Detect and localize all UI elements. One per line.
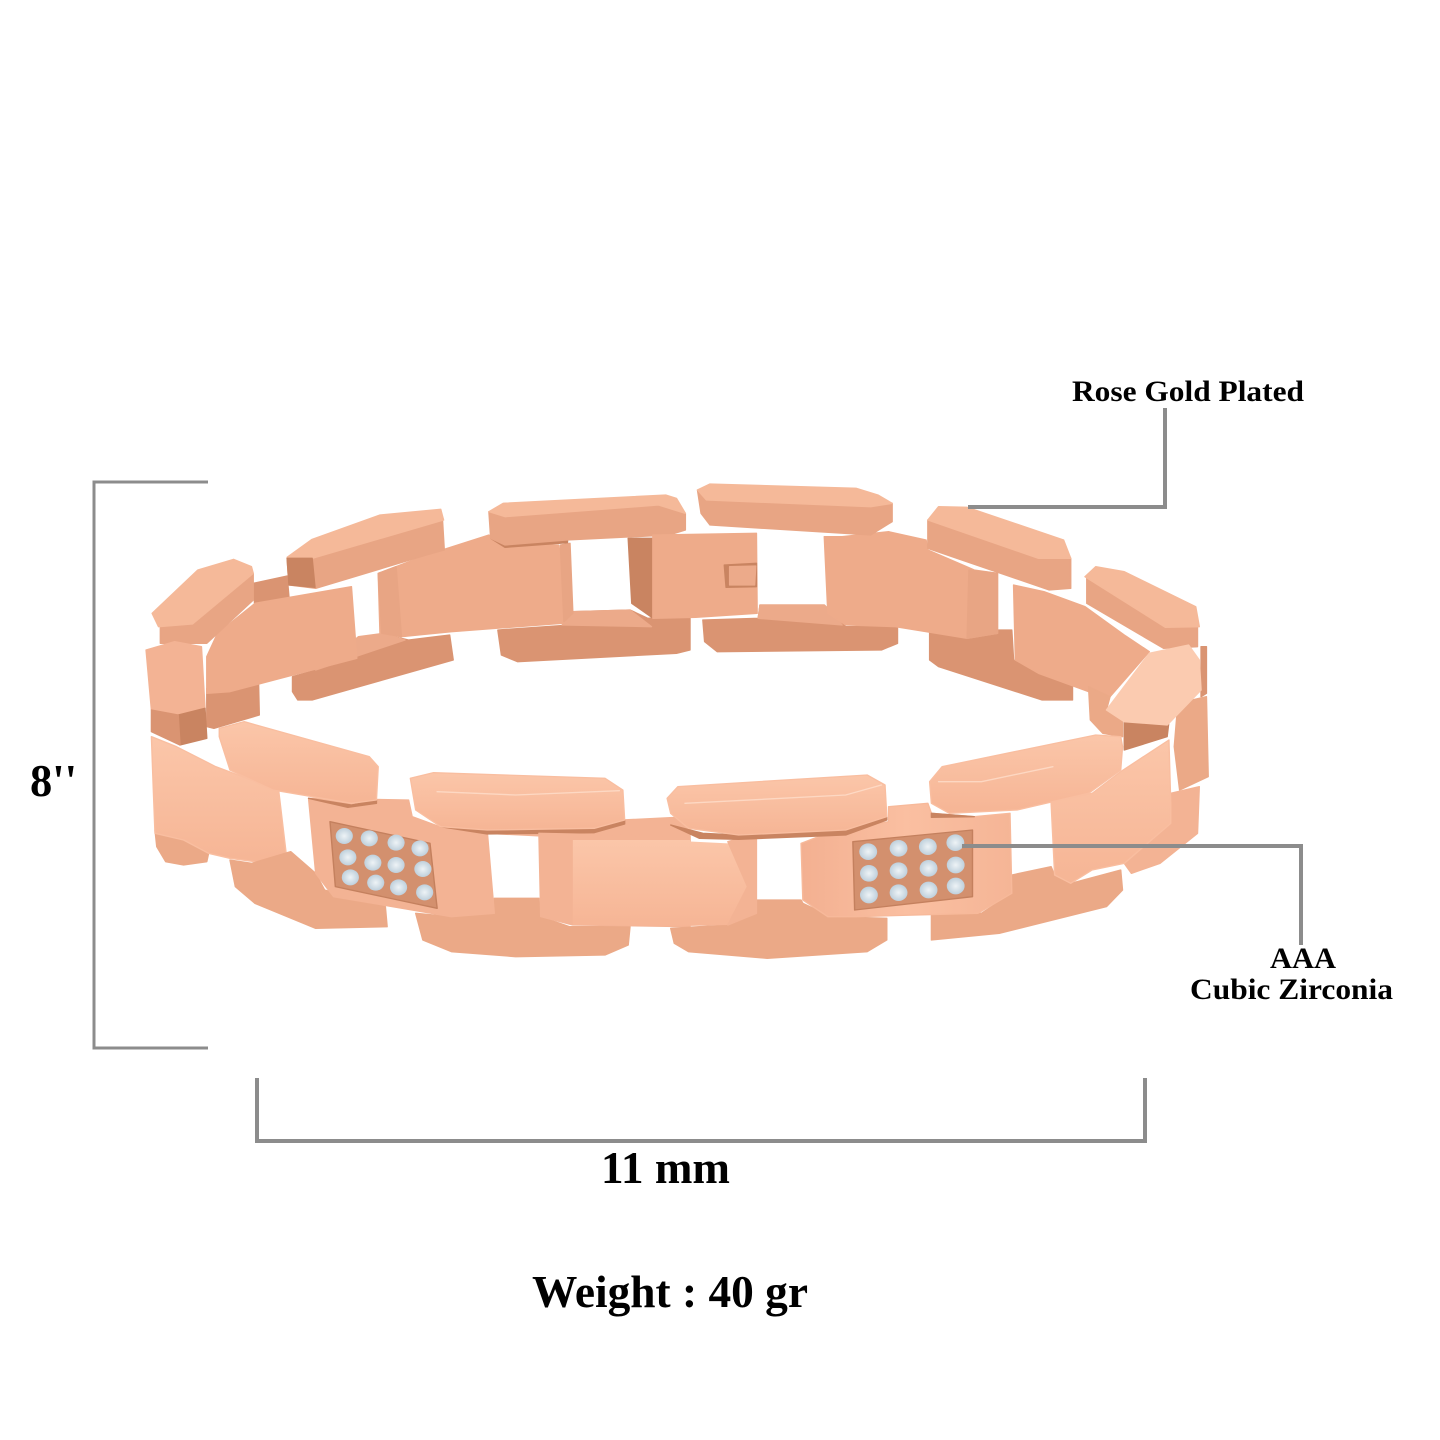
label: weight: Weight : 40 gr <box>532 1266 808 1317</box>
bracelet <box>146 484 1208 958</box>
label: AAA cubic zirconia <box>1190 942 1393 1006</box>
bracelet left half back row <box>146 495 690 745</box>
bracelet left half front row <box>151 722 690 957</box>
leader line: cubic zirconia <box>962 846 1301 945</box>
label: width: 11 mm <box>601 1142 730 1193</box>
label: rose gold plated: Rose Gold Plated <box>1072 375 1304 408</box>
right stones <box>859 834 965 903</box>
label: AAA cubic zirconia: AAA <box>1270 942 1336 975</box>
width bracket <box>257 1078 1145 1141</box>
left stones <box>336 828 433 900</box>
bracelet right half back row <box>653 484 1208 873</box>
label: AAA cubic zirconia: Cubic Zirconia <box>1190 973 1393 1006</box>
leader line: rose gold plated <box>968 408 1165 507</box>
height bracket <box>94 482 208 1048</box>
label: height: 8'' <box>30 755 77 806</box>
bracelet right half front row <box>660 735 1171 958</box>
